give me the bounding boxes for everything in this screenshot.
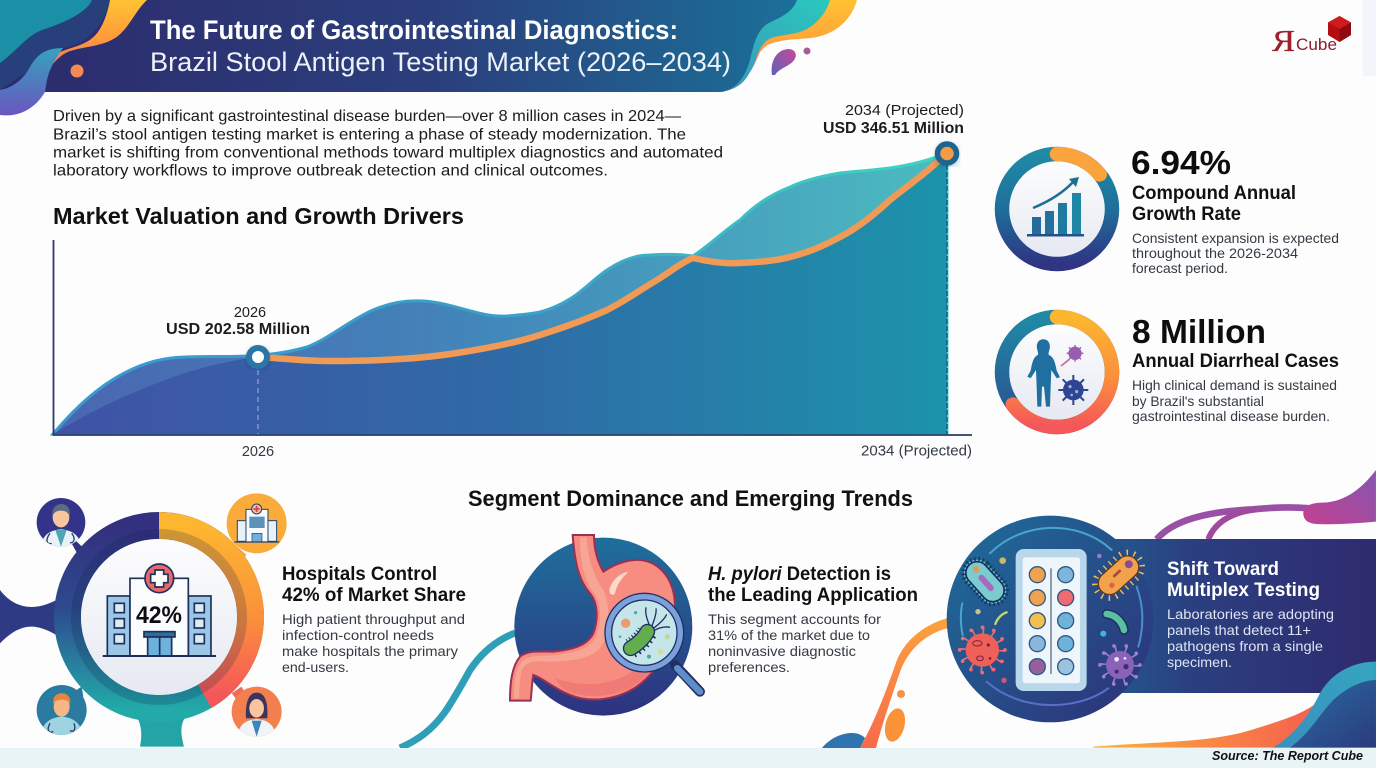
area chart: market valuation bbox=[53, 102, 972, 460]
logo: RCube bbox=[1272, 16, 1351, 58]
text: 8 Million bbox=[1132, 313, 1339, 424]
title: Brazil Stool Antigen Testing Market (2026–2034) bbox=[150, 47, 731, 77]
text: 8 Million: High clinical demand is sustained bbox=[1132, 377, 1337, 393]
intro paragraph bbox=[53, 108, 723, 180]
text: hospitals: High patient throughput and bbox=[282, 611, 465, 627]
text: multiplex: panels that detect 11+ bbox=[1167, 622, 1311, 638]
text: 8 Million: Annual Diarrheal Cases bbox=[1132, 351, 1339, 372]
icon: doctor top left bbox=[37, 498, 85, 550]
orange bacterium bbox=[1091, 548, 1147, 602]
logo: RCube: Cube bbox=[1296, 36, 1337, 54]
icon: multiplex panel and pathogens bbox=[947, 516, 1153, 722]
marker 2026 bbox=[249, 348, 267, 366]
icon: hospital top right bbox=[227, 493, 287, 553]
text: H. pylori bbox=[708, 564, 918, 675]
intro paragraph: laboratory workflows to improve outbreak detection and clinical outcomes. bbox=[53, 162, 608, 180]
test plate bbox=[1016, 549, 1087, 691]
panel: H. pylori bbox=[510, 535, 918, 716]
text: hospitals: Hospitals Control bbox=[282, 564, 437, 585]
x axis label 2034: 2034 (Projected) bbox=[861, 444, 972, 460]
decorative ribbon: orange bbox=[822, 618, 948, 748]
heading: market valuation: Market Valuation and Growth Drivers bbox=[53, 203, 464, 229]
text: multiplex: specimen. bbox=[1167, 654, 1232, 670]
text: 6.94% bbox=[1131, 144, 1339, 276]
axes bbox=[54, 240, 972, 435]
text: 42%: 42% bbox=[136, 602, 182, 629]
orange growth line bbox=[258, 153, 947, 361]
icon: doctor bottom left bbox=[37, 685, 87, 738]
text: multiplex: Laboratories are adopting bbox=[1167, 606, 1334, 622]
lower area bbox=[53, 153, 947, 434]
label 2034 value bbox=[823, 102, 964, 137]
green capsule bbox=[1107, 614, 1124, 630]
text: H. pylori: the Leading Application bbox=[708, 585, 918, 606]
small dots bbox=[999, 557, 1006, 564]
text: 6.94%: Compound Annual bbox=[1132, 183, 1296, 204]
icon: hospital building bbox=[103, 564, 216, 656]
text: H. pylori: 31% of the market due to bbox=[708, 627, 870, 643]
panel: hospitals bbox=[0, 493, 466, 747]
text: H. pylori: This segment accounts for bbox=[708, 611, 881, 627]
text: multiplex: Multiplex Testing bbox=[1167, 580, 1320, 601]
text: 8 Million: by Brazil's substantial bbox=[1132, 393, 1264, 409]
title bbox=[150, 15, 731, 77]
text: hospitals: 42% of Market Share bbox=[282, 585, 466, 606]
top-right side panel bbox=[1363, 0, 1376, 76]
stat: CAGR bbox=[1002, 144, 1339, 276]
text: H. pylori: H. pylori Detection is bbox=[708, 564, 891, 585]
intro paragraph: market is shifting from conventional methods toward multiplex diagnostics and automated bbox=[53, 144, 723, 162]
text: hospitals: end-users. bbox=[282, 659, 349, 675]
label 2034 value: 2034 (Projected) bbox=[845, 102, 964, 119]
icon: hospital ring with connectors bbox=[0, 493, 287, 747]
text: H. pylori: noninvasive diagnostic bbox=[708, 643, 856, 659]
text: 6.94%: Growth Rate bbox=[1132, 204, 1241, 225]
text: 6.94%: throughout the 2026-2034 bbox=[1132, 245, 1298, 261]
intro paragraph: Brazil’s stool antigen testing market is entering a phase of steady modernization. The bbox=[53, 126, 686, 144]
label 2026 value: USD 202.58 Million bbox=[166, 321, 310, 338]
text: hospitals bbox=[282, 564, 466, 675]
text: multiplex bbox=[1167, 559, 1334, 670]
source note: Source: The Report Cube bbox=[1212, 748, 1363, 763]
text: H. pylori: preferences. bbox=[708, 659, 790, 675]
logo: RCube: Я bbox=[1272, 23, 1295, 58]
upper area bbox=[53, 153, 947, 434]
teal bacterium bbox=[958, 554, 1012, 609]
icon: stomach with magnifier bbox=[510, 535, 700, 716]
heading: segment dominance: Segment Dominance and Emerging Trends bbox=[468, 486, 913, 511]
text: 6.94%: Consistent expansion is expected bbox=[1132, 230, 1339, 246]
title: The Future of Gastrointestinal Diagnostics: bbox=[150, 15, 678, 45]
purple virus bbox=[1103, 648, 1137, 682]
text: multiplex: pathogens from a single bbox=[1167, 638, 1323, 654]
text: 6.94%: forecast period. bbox=[1132, 260, 1228, 276]
stat: annual cases bbox=[1002, 313, 1339, 427]
red virus bbox=[963, 631, 1002, 669]
bacterium bbox=[646, 607, 670, 630]
label 2026 value: 2026 bbox=[234, 305, 266, 321]
marker 2034 bbox=[938, 144, 956, 163]
banner bbox=[1040, 539, 1376, 693]
magnifier bbox=[675, 665, 700, 692]
text: hospitals: make hospitals the primary bbox=[282, 643, 458, 659]
text: 8 Million: gastrointestinal disease burden. bbox=[1132, 408, 1330, 424]
text: 6.94%: 6.94% bbox=[1131, 144, 1231, 181]
intro paragraph: Driven by a significant gastrointestinal disease burden—over 8 million cases in 2024— bbox=[53, 108, 681, 125]
corner waves bbox=[1093, 662, 1376, 748]
x axis label 2026: 2026 bbox=[242, 444, 274, 460]
icon: growth ring bbox=[1002, 154, 1112, 264]
label 2026 value bbox=[166, 305, 310, 338]
text: hospitals: infection-control needs bbox=[282, 627, 434, 643]
decorative ribbon: purple bbox=[1157, 470, 1376, 539]
footer strip bbox=[0, 748, 1376, 768]
label 2034 value: USD 346.51 Million bbox=[823, 120, 964, 137]
decorative ribbon: teal bbox=[400, 633, 515, 748]
text: 8 Million: 8 Million bbox=[1132, 313, 1266, 350]
icon: person and pathogens ring bbox=[1002, 317, 1112, 427]
header banner bbox=[0, 0, 857, 115]
panel: multiplex testing bbox=[947, 470, 1376, 748]
text: multiplex: Shift Toward bbox=[1167, 559, 1279, 580]
icon: doctor bottom right bbox=[232, 687, 282, 738]
